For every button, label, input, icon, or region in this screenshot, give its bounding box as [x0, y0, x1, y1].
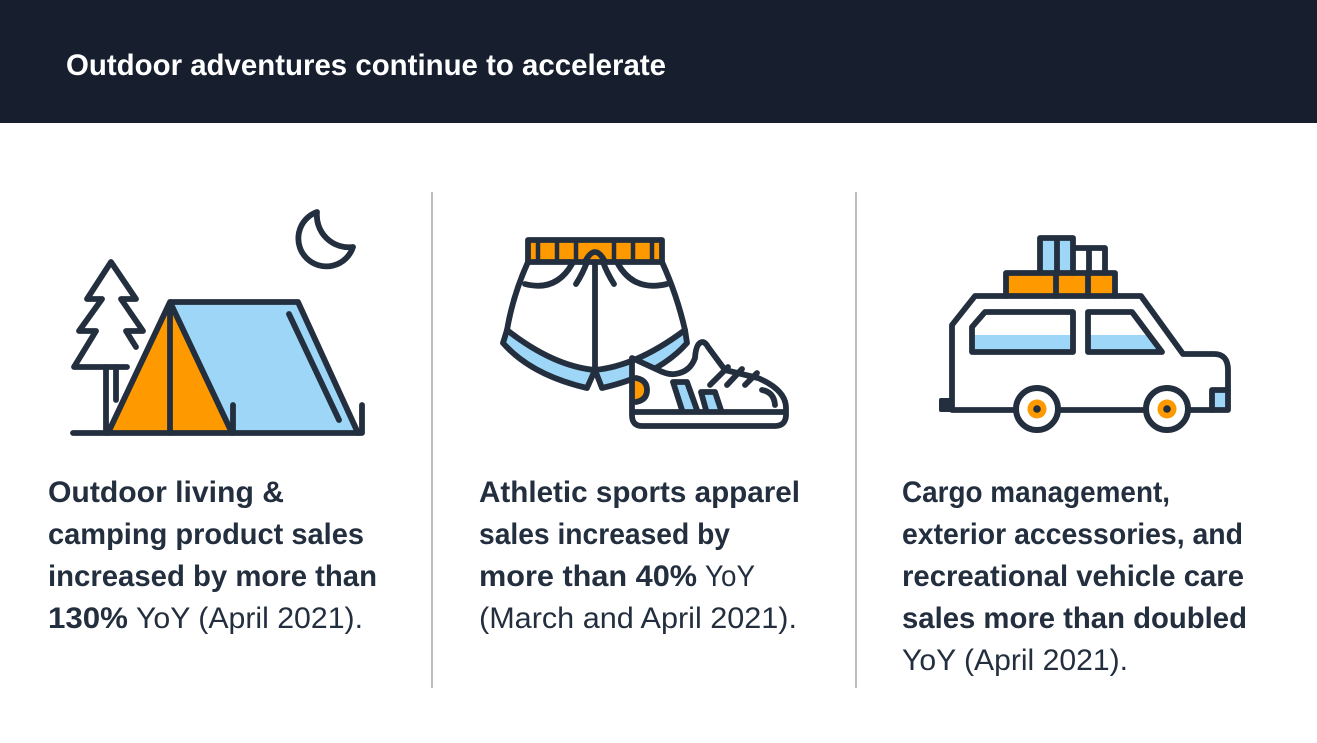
text: apparel statistic: YoY: [705, 560, 755, 593]
text: camping statistic: camping product sales: [48, 518, 364, 551]
text: apparel statistic: sales increased by: [479, 518, 731, 551]
panel: outdoor living and camping: [48, 212, 377, 635]
text: cargo statistic: [902, 476, 1247, 677]
header band: [0, 0, 1317, 123]
text: camping statistic: Outdoor living &: [48, 476, 284, 509]
title: Outdoor adventures continue to accelerate: [66, 49, 666, 82]
text: apparel statistic: more than 40%: [479, 560, 697, 593]
text: camping statistic: YoY (April 2021).: [136, 602, 363, 635]
text: camping statistic: 130%: [48, 602, 128, 635]
text: apparel statistic: (March and April 2021).: [479, 602, 797, 635]
text: cargo statistic: YoY (April 2021).: [902, 644, 1128, 677]
text: cargo statistic: sales more than doubled: [902, 602, 1247, 635]
icon: van: [939, 296, 1228, 430]
icon: roof luggage: [1006, 238, 1115, 296]
text: apparel statistic: Athletic sports apparel: [479, 476, 800, 509]
icon: tent: [73, 302, 362, 433]
icon: moon: [298, 212, 353, 266]
icon: shorts: [503, 240, 687, 388]
text: apparel statistic: [479, 476, 800, 635]
text: camping statistic: [48, 476, 377, 635]
text: camping statistic: increased by more than: [48, 560, 377, 593]
icon: sneaker: [632, 342, 786, 426]
text: cargo statistic: exterior accessories, and: [902, 518, 1243, 551]
icon: front wheel: [1146, 388, 1188, 430]
icon: rear wheel: [1016, 388, 1058, 430]
text: cargo statistic: Cargo management,: [902, 476, 1170, 509]
text: cargo statistic: recreational vehicle care: [902, 560, 1244, 593]
panel: cargo and vehicle care: [902, 238, 1247, 677]
icon: pine tree: [74, 262, 143, 433]
panel: athletic sports apparel: [479, 240, 800, 635]
